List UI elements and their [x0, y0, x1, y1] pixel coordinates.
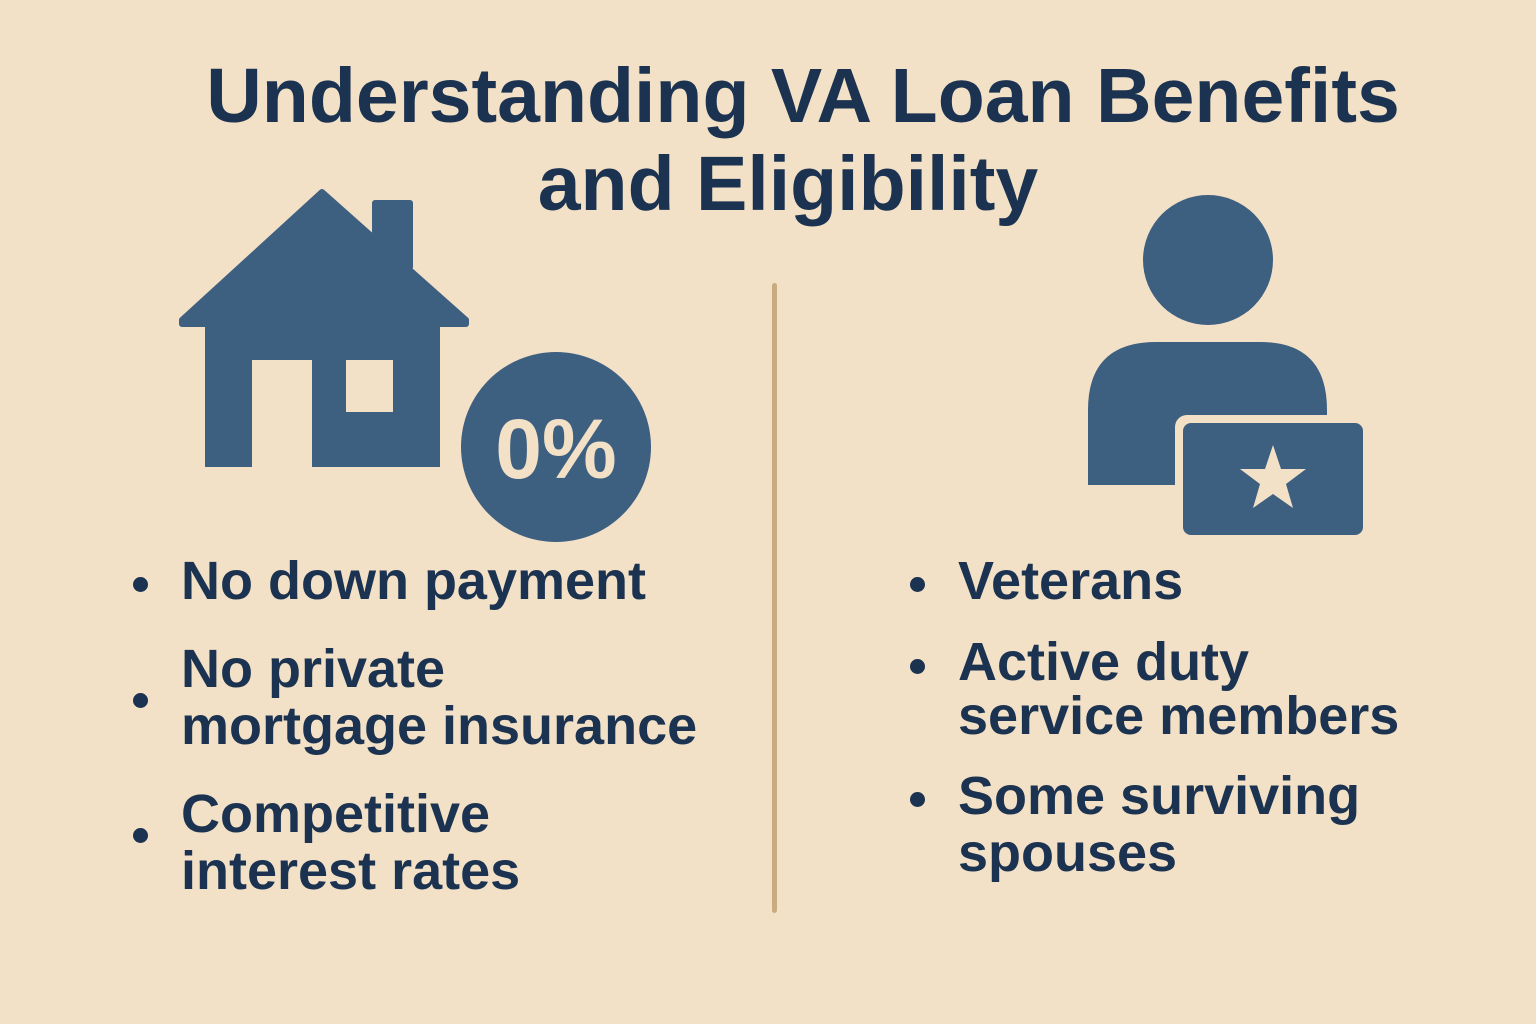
bullet: competitive rates — [181, 786, 520, 900]
title — [206, 53, 1400, 227]
bullet: active duty: Active duty — [958, 632, 1249, 692]
bullet: competitive rates: Competitive — [181, 784, 490, 844]
bullet: competitive rates: interest rates — [181, 841, 520, 901]
left bullet list — [133, 551, 697, 901]
right bullet list — [910, 551, 1399, 883]
bullet: veterans: Veterans — [958, 551, 1183, 611]
bullet: no down payment: No down payment — [181, 551, 646, 611]
title: Understanding VA Loan Benefits — [206, 53, 1400, 139]
bullet: no PMI: No private — [181, 639, 445, 699]
icon: house with 0%: 0% — [495, 402, 617, 496]
title: and Eligibility — [538, 141, 1038, 227]
divider — [772, 283, 777, 913]
bullet: no PMI: mortgage insurance — [181, 696, 697, 756]
bullet: active duty: service members — [958, 686, 1399, 746]
bullet: surviving spouses — [958, 768, 1360, 882]
bullet: surviving spouses: Some surviving — [958, 766, 1360, 826]
bullet: no PMI — [181, 641, 697, 755]
bullet: surviving spouses: spouses — [958, 823, 1177, 883]
bullet: active duty — [958, 635, 1399, 743]
